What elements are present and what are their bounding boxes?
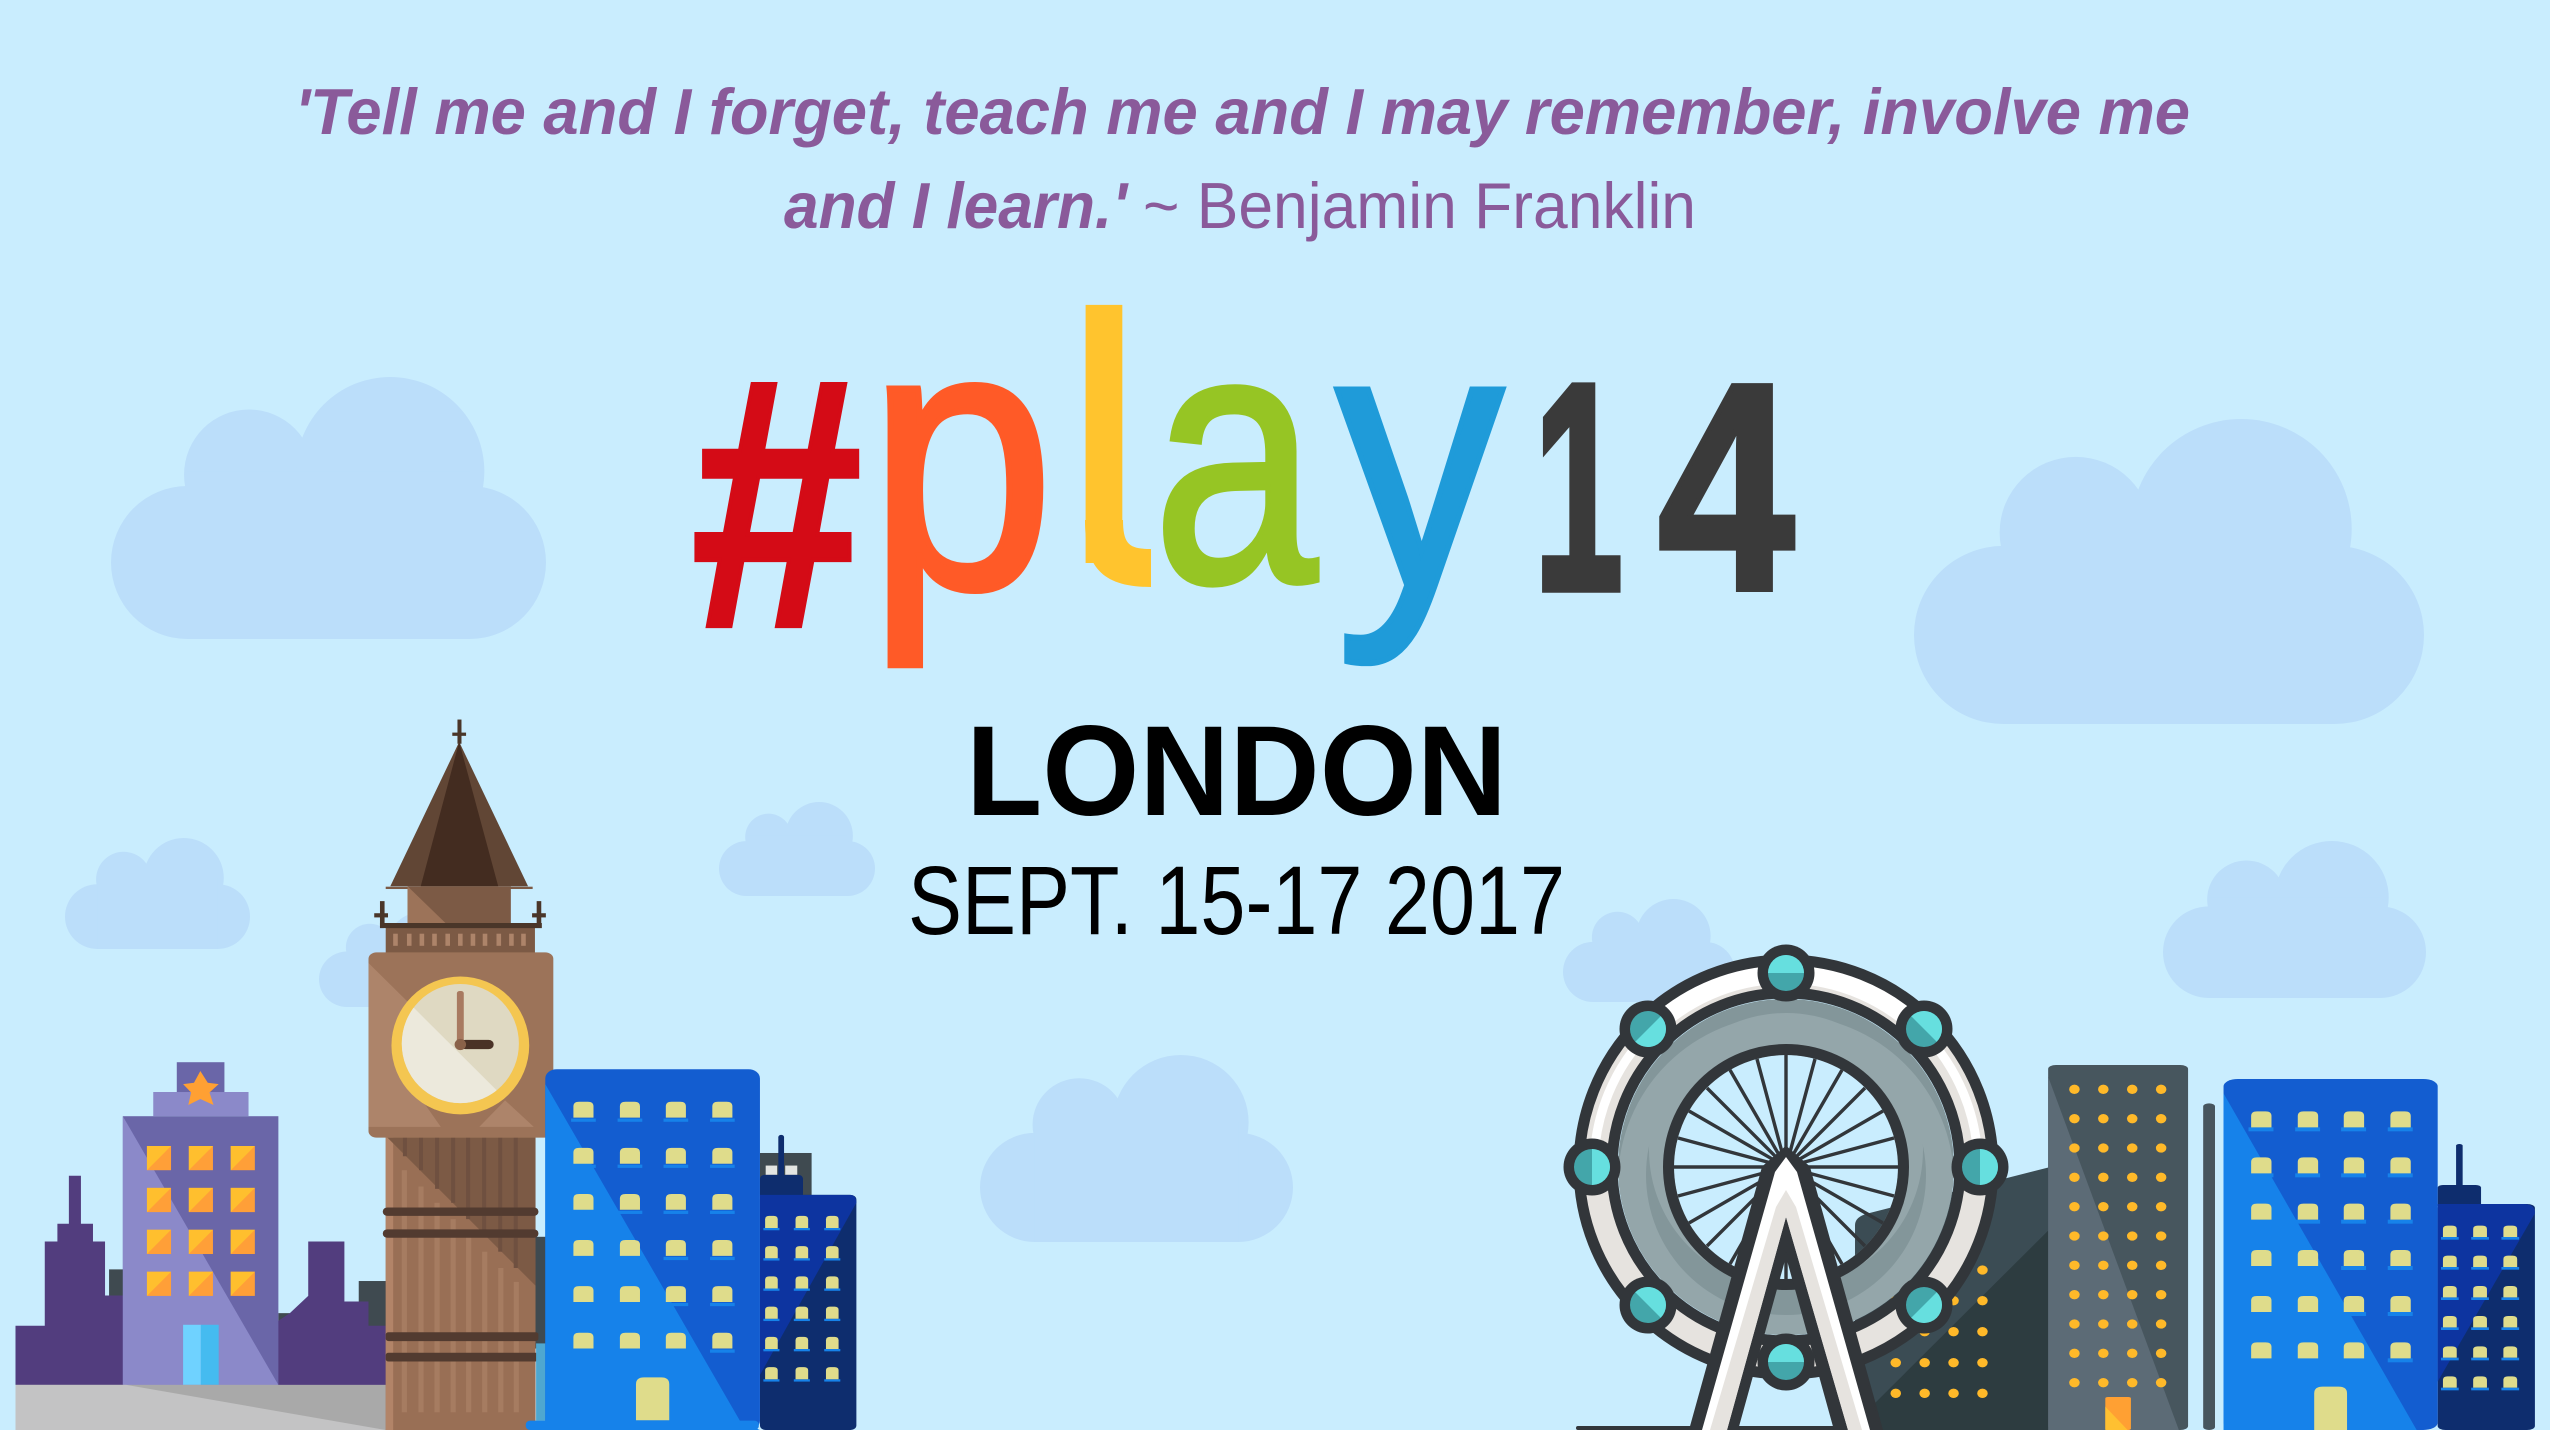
wheel disc xyxy=(1618,999,1954,1349)
quote line 2: and I learn.' xyxy=(784,169,1129,242)
dark building lights xyxy=(1890,1265,1988,1398)
blue building door xyxy=(636,1377,669,1420)
clock face xyxy=(391,977,529,1114)
narrow teal strip xyxy=(536,1343,546,1421)
left cityscape xyxy=(15,720,856,1430)
location heading: LONDON xyxy=(966,700,1507,843)
hotel building xyxy=(123,1062,278,1385)
Big Ben tower xyxy=(368,720,553,1430)
right cityscape: buildings xyxy=(1855,1065,2535,1430)
purple skyline xyxy=(15,1176,387,1385)
back grey tower xyxy=(760,1153,812,1196)
attribution: ~ Benjamin Franklin xyxy=(1143,169,1696,242)
grey tower door xyxy=(2105,1397,2131,1430)
blue building xyxy=(526,1069,760,1430)
wheel A-frame legs xyxy=(1690,1147,1882,1430)
logo hash: # xyxy=(691,306,862,702)
date: SEPT. 15-17 2017 xyxy=(908,846,1565,955)
blue building windows xyxy=(571,1102,735,1353)
hotel door xyxy=(183,1325,219,1385)
navy building windows right xyxy=(2441,1226,2519,1390)
logo digit 4: 4 xyxy=(1658,324,1796,652)
tower bands xyxy=(383,1207,538,1362)
logo letter l: l xyxy=(1065,245,1143,634)
quote line 1: 'Tell me and I forget, teach me and I may remember, involve me xyxy=(295,75,2190,148)
tower neck xyxy=(408,886,511,924)
thin pole xyxy=(2203,1103,2215,1430)
wheel hub xyxy=(1770,1151,1802,1183)
hotel windows xyxy=(147,1146,255,1296)
navy building windows xyxy=(763,1216,840,1382)
background grey buildings xyxy=(109,1237,546,1349)
ground xyxy=(15,1385,389,1430)
navy building right xyxy=(2438,1144,2535,1430)
tower stripes xyxy=(402,1170,519,1412)
clock box xyxy=(368,952,553,1138)
logo letter y: y xyxy=(1336,251,1504,667)
navy building xyxy=(760,1135,856,1430)
wheel base xyxy=(1576,1426,1882,1430)
icon: star xyxy=(183,1071,219,1105)
blue building windows right xyxy=(2249,1111,2413,1362)
spire xyxy=(386,720,533,889)
dark building behind wheel xyxy=(1855,1167,2049,1430)
logo digit 1: 1 xyxy=(1534,323,1623,652)
logo letter a: a xyxy=(1153,255,1319,658)
logo: #play14 xyxy=(691,245,1796,702)
wheel rim xyxy=(1579,960,1993,1374)
wheel pods xyxy=(1564,944,2008,1390)
clouds xyxy=(65,377,2426,1242)
blue building door right xyxy=(2314,1387,2347,1430)
belfry with ticks xyxy=(374,901,546,953)
grey tower xyxy=(2048,1065,2188,1430)
logo letter p: p xyxy=(868,248,1054,669)
wheel spokes xyxy=(1668,1050,1904,1284)
blue building right xyxy=(2224,1079,2438,1430)
ferris wheel xyxy=(1564,944,2008,1430)
grey tower lights xyxy=(2069,1085,2166,1387)
quote xyxy=(295,75,2190,242)
